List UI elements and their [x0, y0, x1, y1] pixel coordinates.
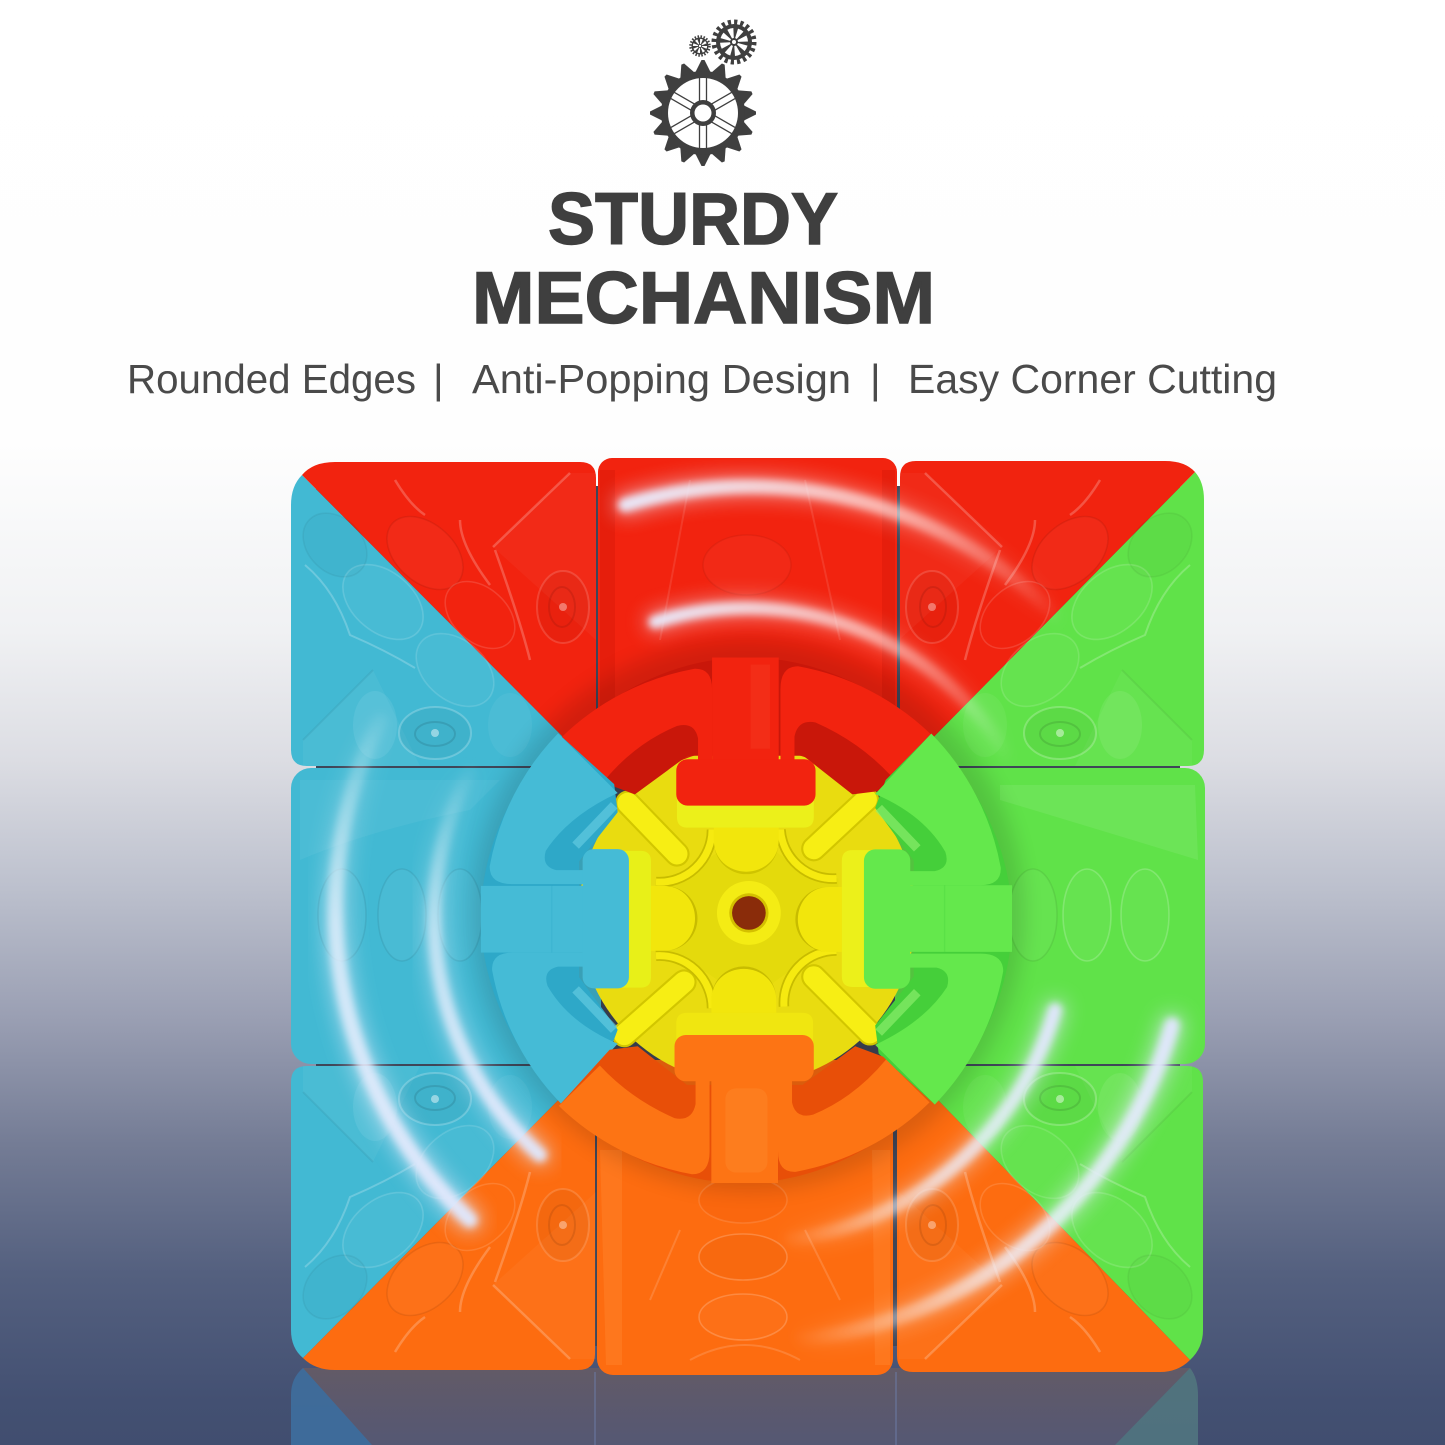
subtitle features: Easy Corner Cutting [908, 356, 1277, 402]
cube floor reflection [291, 1368, 1198, 1445]
motion arcs: rotation swooshes [335, 487, 1172, 1340]
subtitle features: Rounded Edges [127, 356, 416, 402]
corner piece: top right [899, 461, 1205, 766]
arc: left outer [335, 720, 470, 1220]
seam shadow lower row [291, 1068, 1203, 1076]
arc: top outer [625, 487, 1060, 620]
subtitle features: | [433, 356, 444, 402]
exposed core mechanism [481, 658, 1012, 1183]
arc: bottom right outer [800, 1025, 1172, 1340]
icon: gears [650, 22, 756, 166]
corner piece: bottom right [897, 1066, 1205, 1372]
title: STURDY [548, 179, 838, 260]
cube [290, 458, 1205, 1375]
title: MECHANISM [472, 258, 935, 339]
medium gear [714, 22, 754, 62]
arm: green right [795, 734, 1012, 1104]
corner piece: top left [290, 462, 596, 766]
edge piece: left blue [291, 768, 601, 1064]
subtitle features: Anti-Popping Design [472, 356, 851, 402]
shadow around core [472, 639, 1024, 1191]
yellow core disc [579, 747, 916, 1084]
arm: orange bottom [559, 966, 930, 1183]
subtitle features: | [870, 356, 881, 402]
small gear [690, 36, 710, 56]
title [472, 179, 935, 339]
center screw hole [717, 881, 781, 945]
arc: bottom right inner [790, 1010, 1055, 1240]
subtitle features [127, 356, 1277, 402]
edge piece: top red [598, 458, 897, 778]
curved yellow rings [656, 829, 837, 1008]
large gear [650, 60, 756, 166]
arm: red top [561, 658, 931, 874]
edge piece: bottom orange [597, 1060, 893, 1375]
edge piece: right green [895, 768, 1205, 1064]
cube backing seams [316, 486, 1180, 1346]
arc: top inner [655, 608, 1010, 760]
corner piece: bottom left [290, 1066, 596, 1370]
arm: blue left [481, 733, 697, 1104]
diagonal yellow struts [624, 800, 870, 1035]
inner plate [656, 822, 838, 1008]
arc: left inner [434, 770, 540, 1155]
